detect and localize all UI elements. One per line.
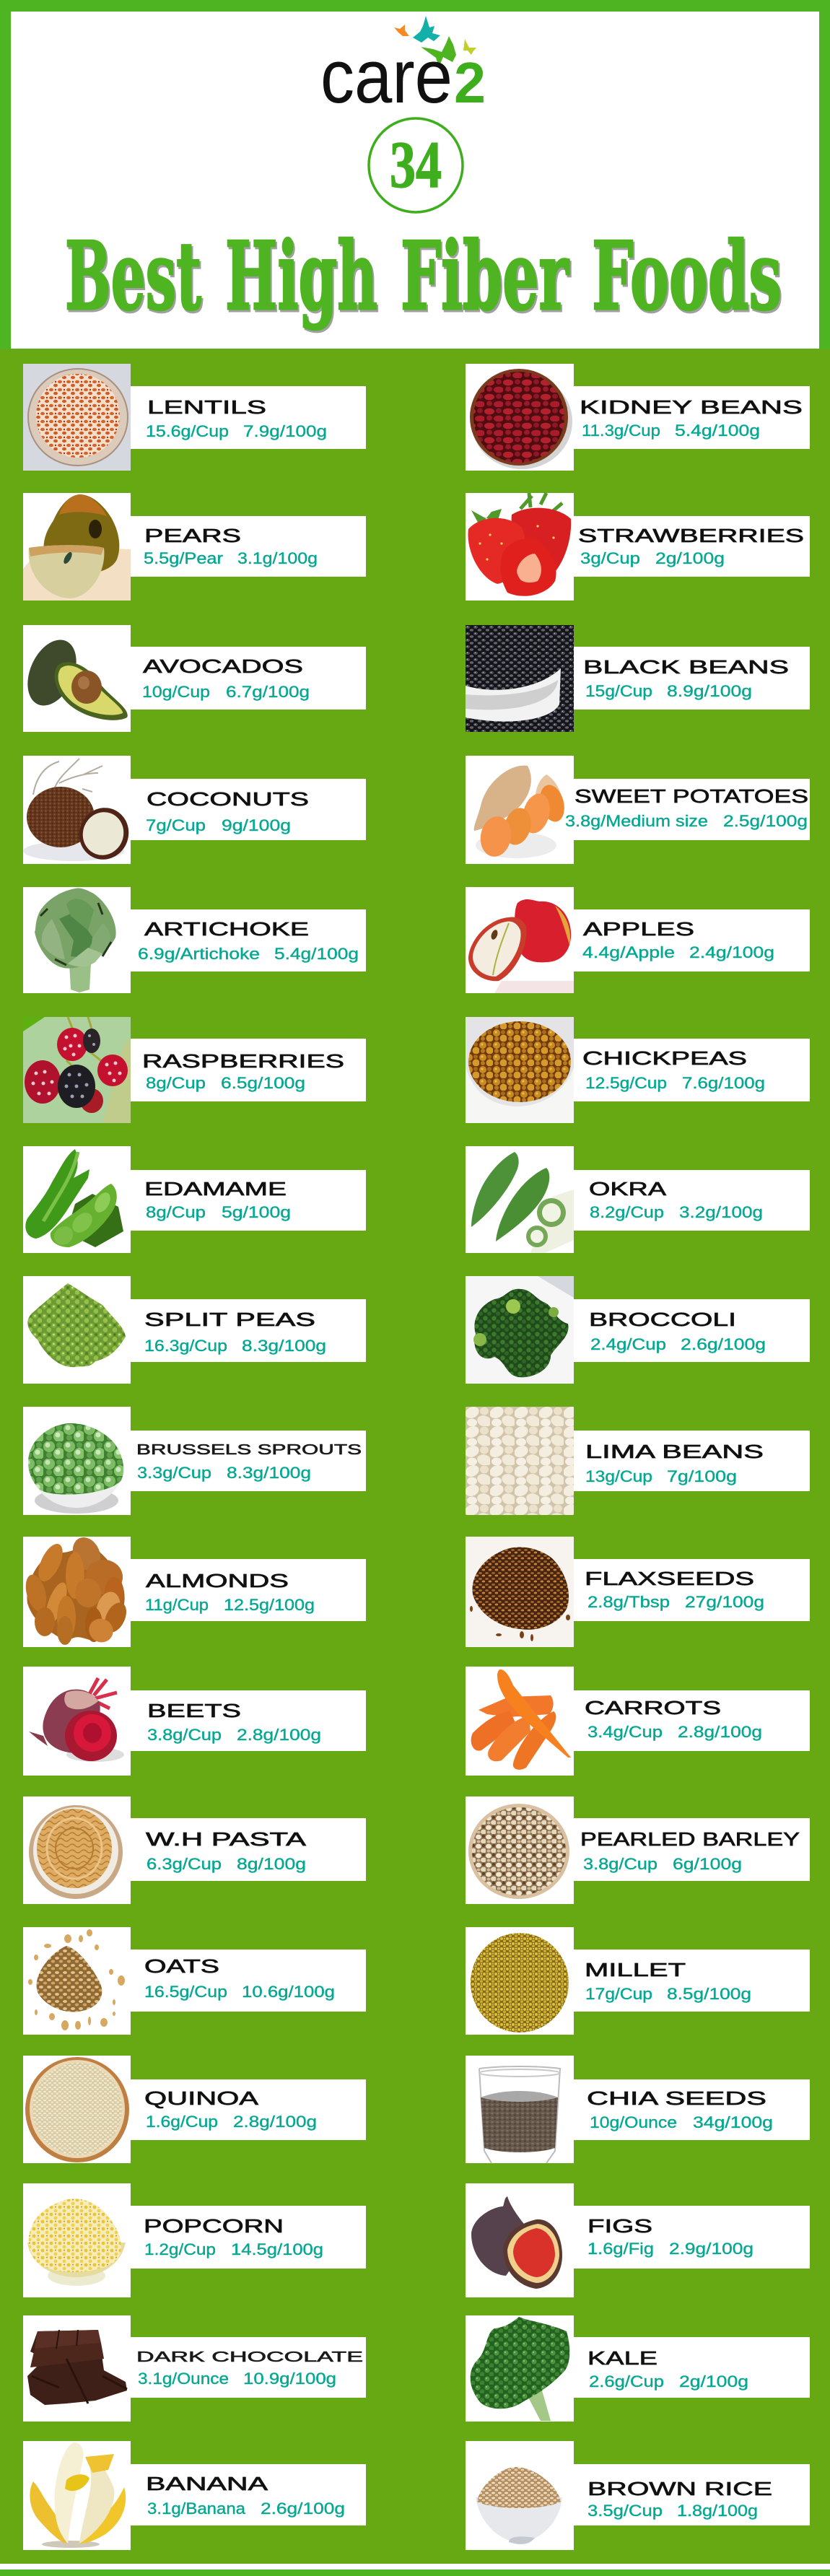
fiber amounts: 1.2g/Cup [144,2240,216,2258]
title: Best [66,223,203,333]
fiber amounts: 2.8g/Tbsp [587,1593,670,1611]
fiber amounts [147,2499,345,2518]
fiber amounts: 2g/100g [655,549,725,567]
fiber amounts: 3.2g/100g [679,1203,763,1221]
fiber amounts [585,1074,765,1092]
fiber amounts: 7g/100g [667,1467,737,1485]
fiber amounts: 6g/100g [673,1855,742,1873]
fiber amounts: 3.8g/Cup [147,1726,222,1744]
number badge: 34: 34 [390,128,442,201]
logo: care2 with butterflies: 2 [454,51,486,115]
name: CHIA SEEDS [587,2087,766,2109]
fiber amounts [137,1464,311,1482]
fiber amounts: 11g/Cup [145,1596,209,1614]
fiber amounts: 17g/Cup [585,1985,652,2003]
icon: popcorn [23,2183,131,2297]
card: Apples [466,887,810,993]
icon: dark chocolate [23,2315,131,2422]
fiber amounts: 3.8g/Medium size [565,812,708,830]
card: Flaxseeds [466,1537,810,1647]
card: Okra [466,1146,810,1253]
name: MILLET [585,1959,686,1981]
fiber amounts: 2.4g/Cup [590,1335,666,1353]
icon: black beans [466,625,574,732]
icon: almonds [22,1533,131,1647]
card: Banana [23,2441,366,2550]
name: BROCCOLI [589,1309,736,1330]
name: OATS [144,1955,219,1977]
icon: chickpeas [466,1017,574,1123]
fiber amounts: 3.1g/Banana [147,2499,246,2518]
name: BEETS [147,1700,241,1721]
card: Kidney Beans [466,364,810,471]
name: ARTICHOKE [144,918,309,940]
number badge: 34 [369,118,463,212]
fiber amounts: 13g/Cup [585,1467,652,1485]
icon: pears [23,493,131,601]
fiber amounts [582,422,760,440]
fiber amounts: 5.5g/Pear [144,549,224,567]
name: PEARS [144,525,241,546]
fiber amounts [146,816,291,834]
name: FIGS [587,2215,652,2237]
name: BROWN RICE [587,2478,772,2499]
fiber amounts [565,812,808,830]
header panel [0,0,830,349]
icon: strawberries [466,493,574,601]
fiber amounts [580,549,725,567]
name: PEARLED BARLEY [580,1828,800,1850]
fiber amounts: 5g/100g [222,1203,291,1221]
icon: oats [23,1927,131,2035]
fiber amounts: 1.6g/Cup [146,2113,218,2131]
fiber amounts: 7g/Cup [146,816,206,834]
fiber amounts: 11.3g/Cup [582,422,660,440]
fiber amounts [144,1337,326,1355]
fiber amounts: 8.9g/100g [667,682,752,700]
icon: lima beans [466,1407,574,1515]
fiber amounts: 8.3g/100g [242,1337,326,1355]
fiber amounts [146,1074,305,1092]
fiber amounts: 16.3g/Cup [144,1337,227,1355]
icon: flaxseeds [466,1537,574,1647]
card: Broccoli [466,1276,810,1384]
fiber amounts [144,2240,323,2258]
icon: artichoke [23,887,131,993]
icon: lentils [23,364,131,471]
fiber amounts [585,682,752,700]
fiber amounts: 6.9g/Artichoke [138,945,260,963]
icon: beets [23,1667,131,1776]
fiber amounts: 14.5g/100g [231,2240,323,2258]
icon: edamame [23,1146,131,1253]
fiber amounts: 2.8g/100g [233,2113,317,2131]
fiber amounts: 8.2g/Cup [590,1203,664,1221]
card: Sweet Potatoes [466,756,810,864]
fiber amounts [585,1467,737,1485]
name: CHICKPEAS [582,1047,747,1069]
fiber amounts [138,945,359,963]
fiber amounts: 2.6g/100g [681,1335,766,1353]
fiber amounts: 2.8g/100g [237,1726,321,1744]
card: Lentils [23,364,366,471]
fiber amounts: 1.8g/100g [677,2502,758,2520]
fiber amounts: 2.6g/Cup [589,2372,664,2391]
fiber amounts: 3g/Cup [580,549,640,567]
icon: brussels sprouts [23,1407,131,1515]
icon: whole wheat pasta [23,1796,131,1904]
name: BLACK BEANS [583,656,789,678]
name: LIMA BEANS [585,1441,764,1462]
name: SWEET POTATOES [575,785,808,807]
card: W.H Pasta [23,1796,366,1904]
name: RASPBERRIES [142,1050,344,1072]
fiber amounts [587,2240,753,2258]
title: Fiber [401,221,569,331]
card: Carrots [466,1667,810,1776]
fiber amounts [147,1855,306,1873]
name: BANANA [146,2473,268,2494]
fiber amounts: 2.8g/100g [678,1723,762,1741]
card: Pears [23,493,366,601]
card: Dark Chocolate [23,2315,366,2422]
card: Chickpeas [466,1017,810,1123]
fiber amounts: 2.6g/100g [261,2499,345,2518]
name: W.H PASTA [146,1828,307,1850]
fiber amounts: 10g/Ounce [590,2113,677,2131]
card: Beets [23,1667,366,1776]
fiber amounts: 7.9g/100g [243,422,327,440]
fiber amounts: 8g/Cup [146,1074,206,1092]
fiber amounts [590,2113,773,2131]
fiber amounts: 8.5g/100g [667,1985,751,2003]
footer stripes [0,2564,830,2576]
logo: care2 with butterflies: care [320,35,453,119]
icon: banana [23,2441,131,2550]
card: Lima Beans [466,1407,810,1515]
card: Brown Rice [466,2441,810,2550]
name: CARROTS [585,1697,721,1719]
card: Kale [466,2315,810,2422]
icon: sweet potatoes [466,756,574,864]
name: BRUSSELS SPROUTS [136,1442,362,1458]
card: Figs [466,2183,810,2297]
fiber amounts: 8g/100g [237,1855,306,1873]
fiber amounts [587,2502,758,2520]
icon: avocados [18,625,131,732]
fiber amounts [144,549,318,567]
fiber amounts: 2.4g/100g [689,943,774,961]
icon: okra [466,1146,574,1253]
fiber amounts [147,1726,321,1744]
icon: broccoli [466,1276,574,1384]
name: POPCORN [144,2215,284,2237]
fiber amounts: 15g/Cup [585,682,652,700]
card: Popcorn [23,2183,366,2297]
name: STRAWBERRIES [578,525,804,546]
fiber amounts [590,1203,763,1221]
fiber amounts: 6.7g/100g [226,683,310,701]
fiber amounts: 16.5g/Cup [144,1983,227,2001]
icon: coconuts [23,756,136,866]
fiber amounts: 5.4g/100g [675,422,760,440]
card: Pearled Barley [466,1796,810,1904]
fiber amounts: 3.3g/Cup [137,1464,211,1482]
name: KIDNEY BEANS [580,396,803,418]
icon: pearled barley [466,1796,574,1904]
fiber amounts: 15.6g/Cup [146,422,229,440]
icon: apples [466,887,574,993]
name: AVOCADOS [143,655,303,677]
fiber amounts [145,1596,315,1614]
name: DARK CHOCOLATE [136,2349,363,2365]
fiber amounts [587,1593,764,1611]
fiber amounts: 7.6g/100g [682,1074,765,1092]
fiber amounts: 34g/100g [693,2113,773,2131]
name: LENTILS [147,396,266,418]
icon: millet [466,1927,574,2035]
card: Artichoke [23,887,366,993]
fiber amounts [589,2372,748,2391]
name: APPLES [583,918,694,940]
fiber amounts [587,1723,762,1741]
fiber amounts: 8g/Cup [146,1203,206,1221]
icon: kale [466,2315,574,2422]
title: High [225,221,377,331]
fiber amounts: 10g/Cup [142,683,210,701]
icon: figs [466,2183,574,2297]
fiber amounts: 12.5g/Cup [585,1074,667,1092]
fiber amounts [146,1203,291,1221]
fiber amounts: 6.3g/Cup [147,1855,222,1873]
card: Millet [466,1927,810,2035]
fiber amounts: 9g/100g [222,816,291,834]
name: FLAXSEEDS [585,1568,754,1589]
name: SPLIT PEAS [144,1309,315,1330]
fiber amounts [138,2370,336,2388]
name: KALE [587,2347,658,2369]
fiber amounts: 27g/100g [685,1593,764,1611]
fiber amounts: 2.5g/100g [723,812,808,830]
card: Raspberries [23,1017,366,1123]
fiber amounts [583,1855,742,1873]
fiber amounts: 10.9g/100g [243,2370,336,2388]
card: Strawberries [466,493,810,601]
icon: kidney beans [466,364,574,471]
fiber amounts: 3.1g/Ounce [138,2370,229,2388]
fiber amounts: 8.3g/100g [227,1464,311,1482]
fiber amounts: 3.1g/100g [237,549,318,567]
fiber amounts: 3.8g/Cup [583,1855,658,1873]
name: EDAMAME [144,1178,287,1200]
card: Avocados [18,625,366,732]
icon: quinoa [23,2056,131,2163]
icon: brown rice [466,2441,574,2550]
name: QUINOA [144,2087,259,2109]
card: Split Peas [23,1276,366,1384]
fiber amounts: 2.9g/100g [669,2240,753,2258]
title: High [227,223,379,333]
fiber amounts [144,1983,335,2001]
fiber amounts: 3.4g/Cup [587,1723,663,1741]
fiber amounts [590,1335,766,1353]
fiber amounts [585,1985,751,2003]
fiber amounts: 2g/100g [679,2372,748,2391]
name: COCONUTS [147,788,309,810]
fiber amounts [146,422,327,440]
title: Best [65,221,201,331]
icon: split peas [23,1276,131,1384]
fiber amounts: 5.4g/100g [274,945,359,963]
title: Fiber [402,223,571,333]
card: Oats [23,1927,366,2035]
card: Almonds [22,1533,366,1647]
name: ALMONDS [146,1570,289,1592]
card: Edamame [23,1146,366,1253]
card: Chia Seeds [466,2056,810,2163]
icon: chia seeds [466,2056,574,2163]
fiber amounts [142,683,310,701]
card: Brussels Sprouts [23,1407,366,1515]
fiber amounts: 4.4g/Apple [582,943,675,961]
icon: carrots [466,1667,574,1776]
fiber amounts: 10.6g/100g [242,1983,335,2001]
title [65,221,783,333]
fiber amounts [582,943,774,961]
fiber amounts: 1.6g/Fig [587,2240,654,2258]
fiber amounts [146,2113,317,2131]
card: Quinoa [23,2056,366,2163]
name: OKRA [589,1178,667,1200]
fiber amounts: 12.5g/100g [224,1596,315,1614]
icon: raspberries [23,1017,131,1123]
fiber amounts: 6.5g/100g [221,1074,305,1092]
card: Black Beans [466,625,810,732]
card: Coconuts [23,756,366,866]
fiber amounts: 3.5g/Cup [587,2502,663,2520]
